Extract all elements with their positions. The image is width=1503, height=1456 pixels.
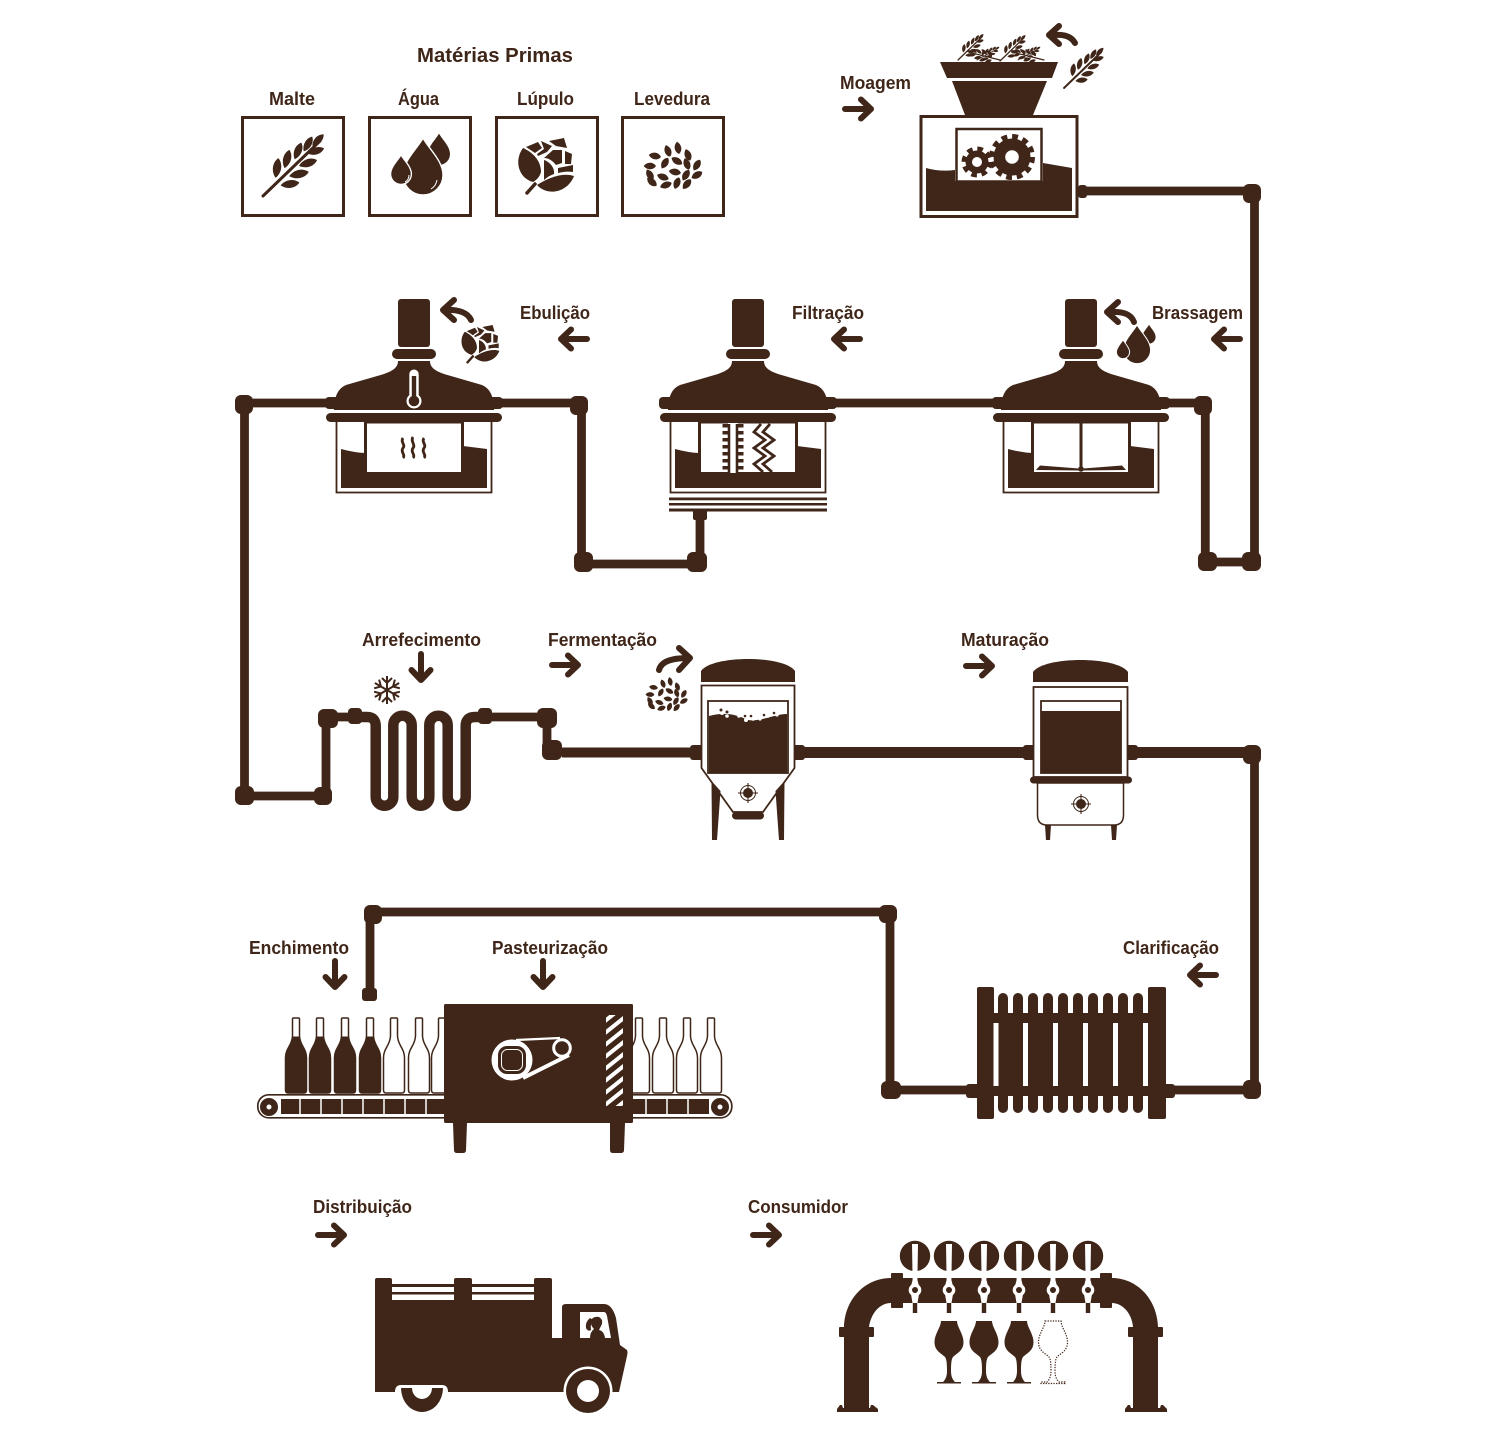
label: filtração: [792, 303, 864, 348]
label: brassagem: [1152, 303, 1243, 348]
infographic: beer production process: [235, 23, 1261, 1413]
radiator clarifier: [977, 987, 1166, 1119]
icon: snowflake: [372, 676, 402, 704]
panel: lúpulo: Lúpulo: [517, 89, 574, 109]
fermentation tank: [701, 659, 795, 840]
label: enchimento: Enchimento: [249, 938, 349, 958]
tap tower: [837, 1241, 1167, 1412]
conveyor belt: [258, 1095, 732, 1118]
panel: levedura: [622, 89, 724, 216]
panel: água: [370, 88, 470, 216]
label: arrefecimento: [362, 630, 481, 680]
label: pasteurização: Pasteurização: [492, 938, 608, 958]
mill machine: [921, 33, 1077, 216]
glasses: [934, 1321, 1068, 1384]
label: arrefecimento: Arrefecimento: [362, 630, 481, 650]
moagem label and arrow: Moagem: [840, 73, 911, 93]
label: fermentação: [548, 630, 657, 674]
label: distribuição: [313, 1197, 412, 1244]
label: ebulição: Ebulição: [520, 303, 590, 323]
curved arrow and wheat into mill: [1049, 26, 1105, 88]
label: clarificação: Clarificação: [1123, 938, 1219, 958]
maturation tank: [1030, 660, 1132, 840]
yeast addition: [646, 648, 690, 713]
pipe elbows and couplings: [235, 184, 1261, 1099]
kettle: ebulição: [325, 299, 503, 492]
kettle: brassagem: [992, 299, 1170, 492]
panel: lúpulo: [496, 89, 598, 216]
label: maturação: [961, 630, 1049, 676]
label: enchimento: [249, 938, 349, 987]
label: filtração: Filtração: [792, 303, 864, 323]
panel: água: Água: [398, 88, 440, 109]
title: Matérias Primas: [417, 45, 573, 67]
panel: levedura: Levedura: [634, 89, 711, 109]
label: ebulição: [520, 303, 590, 348]
label: fermentação: Fermentação: [548, 630, 657, 650]
panel: malte: Malte: [269, 89, 315, 109]
pipes: [244, 191, 1254, 1090]
moagem label and arrow: [840, 73, 911, 118]
label: distribuição: Distribuição: [313, 1197, 412, 1217]
label: brassagem: Brassagem: [1152, 303, 1243, 323]
panel: malte: [242, 89, 344, 216]
pasteurizer machine: [444, 1004, 633, 1153]
water addition: [1107, 302, 1156, 364]
truck: [375, 1278, 628, 1416]
label: consumidor: [748, 1197, 848, 1244]
label: pasteurização: [492, 938, 608, 987]
hop addition: [443, 300, 499, 362]
kettle: filtração: [659, 299, 837, 512]
bottles: [286, 1018, 722, 1093]
label: clarificação: [1123, 938, 1219, 984]
label: consumidor: Consumidor: [748, 1197, 848, 1217]
label: maturação: Maturação: [961, 630, 1049, 650]
